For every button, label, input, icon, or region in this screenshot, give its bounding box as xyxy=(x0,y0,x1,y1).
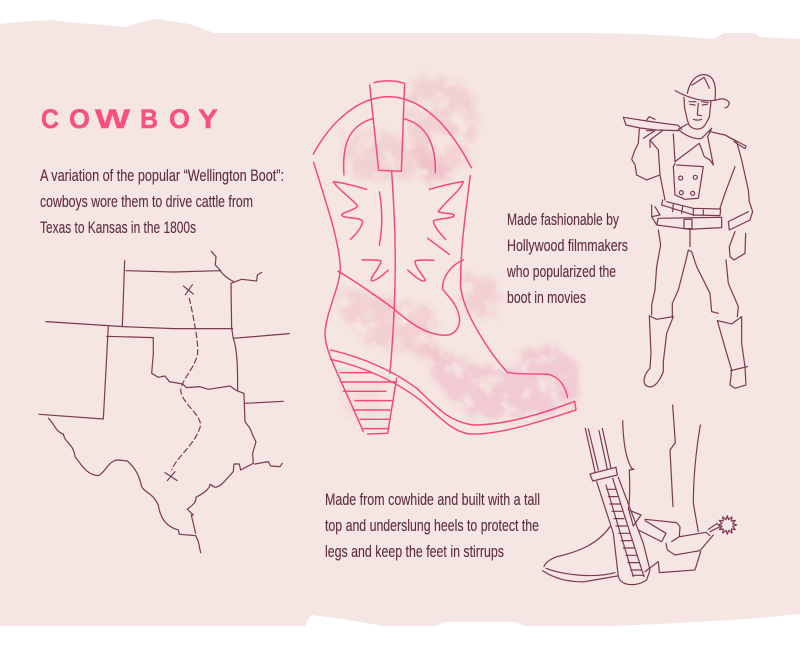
intro text xyxy=(40,166,284,237)
marker: Texas start of route xyxy=(165,472,177,481)
title xyxy=(41,104,218,134)
hollywood text: who popularized the xyxy=(506,262,616,281)
watercolor stain behind boot xyxy=(337,75,581,420)
hollywood text: boot in movies xyxy=(507,288,586,307)
stirrup text: Made from cowhide and built with a tall xyxy=(325,490,540,509)
title: Y xyxy=(198,104,218,134)
icon: spur rowel xyxy=(718,516,737,534)
hollywood text: Made fashionable by xyxy=(507,210,619,229)
map: cattle route from Texas to Kansas xyxy=(39,251,289,553)
stirrup text: legs and keep the feet in stirrups xyxy=(325,542,504,561)
illustration: boot in stirrup with spur xyxy=(543,405,737,585)
hollywood text: Hollywood filmmakers xyxy=(507,236,628,255)
title: W xyxy=(95,104,131,134)
intro text: A variation of the popular “Wellington Boot”: xyxy=(40,166,284,185)
intro text: cowboys wore them to drive cattle from xyxy=(40,192,253,211)
illustration: cowboy figure xyxy=(623,75,753,388)
stirrup text xyxy=(325,490,540,561)
illustration: cowboy boot xyxy=(313,81,576,434)
title: O xyxy=(169,104,190,134)
dashed cattle route xyxy=(172,298,201,470)
hollywood text xyxy=(506,210,628,307)
title: C xyxy=(41,104,59,134)
title: B xyxy=(140,104,158,134)
stirrup text: top and underslung heels to protect the xyxy=(325,516,539,535)
marker: Kansas end of route xyxy=(183,285,193,295)
title: O xyxy=(69,104,90,134)
intro text: Texas to Kansas in the 1800s xyxy=(40,218,196,237)
